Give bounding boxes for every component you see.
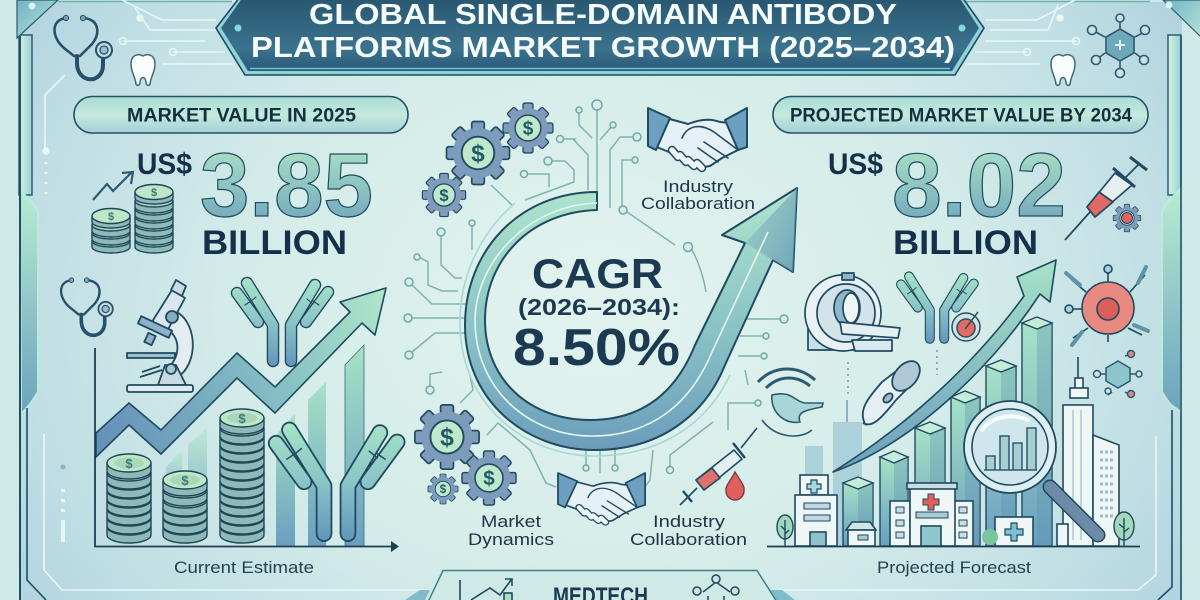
bar three bbox=[915, 422, 945, 546]
CAGR text: (2026–2034): bbox=[518, 294, 680, 320]
label market dynamics: Dynamics bbox=[468, 530, 554, 549]
gears bottom bbox=[415, 405, 516, 505]
label industry collaboration top: Collaboration bbox=[641, 194, 755, 213]
value 3.85 billion: US$ bbox=[137, 148, 192, 181]
CAGR text: CAGR bbox=[532, 250, 663, 297]
icon: blood drop bbox=[726, 472, 744, 500]
bar chart forecast bbox=[843, 317, 1052, 546]
icon: coins and arrow bbox=[92, 172, 173, 253]
pill heading left: MARKET VALUE IN 2025 bbox=[127, 104, 356, 126]
icon: small molecule right bbox=[1094, 350, 1142, 398]
label market dynamics bbox=[468, 512, 554, 549]
axes bbox=[95, 348, 392, 546]
label market dynamics: Market bbox=[481, 512, 541, 531]
syringe bottom bbox=[680, 428, 757, 505]
icon: cancer cell bbox=[1065, 265, 1148, 345]
dotted guides bbox=[848, 350, 937, 395]
icon: stethoscope lower bbox=[61, 278, 113, 335]
label industry collaboration top: Industry bbox=[663, 177, 734, 196]
trees bbox=[777, 512, 1134, 546]
icon: MRI scanner bbox=[805, 273, 900, 351]
skyline background bbox=[805, 400, 862, 546]
ground line bbox=[767, 546, 1140, 548]
icon: stethoscope top left bbox=[54, 15, 112, 79]
icon: molecule top right bbox=[1088, 14, 1150, 78]
antibody upper bbox=[237, 283, 328, 361]
icon: target cell bbox=[952, 312, 980, 341]
title banner bbox=[216, 0, 984, 75]
label industry collaboration bottom bbox=[630, 512, 747, 549]
curved growth arrow bbox=[833, 260, 1056, 472]
label industry collaboration bottom: Collaboration bbox=[630, 530, 747, 549]
icon: ultrasound signal bbox=[758, 369, 823, 436]
clinic bbox=[995, 517, 1033, 546]
antibody right bbox=[901, 276, 974, 339]
pale bars bbox=[166, 345, 364, 546]
value 8.02 billion: 8.02 bbox=[892, 136, 1066, 236]
pill heading left bbox=[74, 96, 408, 133]
handshake bottom bbox=[558, 473, 645, 522]
bottom badge bbox=[405, 570, 795, 600]
pill heading right: PROJECTED MARKET VALUE BY 2034 bbox=[790, 104, 1132, 126]
value 8.02 billion bbox=[828, 136, 1066, 262]
left hospital bbox=[795, 475, 837, 546]
icon: microscope bbox=[127, 280, 193, 392]
icon: tooth right bbox=[1051, 55, 1075, 85]
bar one bbox=[843, 477, 873, 546]
label industry collaboration bottom: Industry bbox=[653, 512, 726, 531]
coin stack two bbox=[163, 471, 207, 543]
center hospital bbox=[890, 483, 973, 546]
chart: coins, bars and growth arrow bbox=[95, 288, 399, 552]
growth zigzag arrow bbox=[96, 288, 386, 457]
magnifying glass bbox=[964, 401, 1098, 535]
bar four bbox=[951, 391, 980, 546]
city buildings bbox=[795, 357, 1119, 546]
title text: PLATFORMS MARKET GROWTH (2025–2034) bbox=[251, 32, 955, 64]
title text bbox=[251, 0, 955, 64]
panel: projected value 2034 bbox=[767, 96, 1148, 577]
caption projected forecast: Projected Forecast bbox=[877, 558, 1031, 577]
tower bbox=[1063, 357, 1119, 546]
label industry collaboration top bbox=[641, 177, 755, 213]
pill heading right bbox=[773, 96, 1148, 133]
icon: ultrasound probe bbox=[863, 356, 925, 424]
gears top bbox=[422, 103, 553, 217]
CAGR text bbox=[513, 250, 680, 377]
bar two bbox=[880, 451, 908, 546]
value 8.02 billion: BILLION bbox=[893, 224, 1038, 262]
coin stack one bbox=[107, 454, 151, 543]
panel: market value 2025 bbox=[61, 96, 408, 577]
icon: syringe top right bbox=[1065, 157, 1147, 240]
circuit traces around ring bbox=[404, 100, 788, 487]
icon: mini molecule bbox=[693, 575, 739, 600]
value 3.85 billion bbox=[137, 136, 373, 262]
value 3.85 billion: 3.85 bbox=[200, 136, 373, 236]
right frame bbox=[1158, 0, 1200, 600]
antibody lower bbox=[276, 430, 397, 534]
coin stack three bbox=[220, 409, 264, 543]
bar five bbox=[986, 360, 1016, 546]
value 8.02 billion: US$ bbox=[828, 148, 883, 181]
icon: small gear red bbox=[1113, 204, 1141, 232]
icon: tooth left bbox=[131, 55, 155, 85]
handshake top bbox=[648, 108, 747, 168]
icon: mini growth chart bbox=[460, 579, 512, 600]
CAGR text: 8.50% bbox=[513, 319, 680, 377]
left frame bbox=[17, 0, 58, 600]
center CAGR ring arrow bbox=[460, 188, 797, 456]
caption current estimate: Current Estimate bbox=[174, 558, 314, 577]
value 3.85 billion: BILLION bbox=[202, 224, 347, 262]
small house bbox=[846, 522, 876, 546]
bar six bbox=[1022, 317, 1052, 546]
